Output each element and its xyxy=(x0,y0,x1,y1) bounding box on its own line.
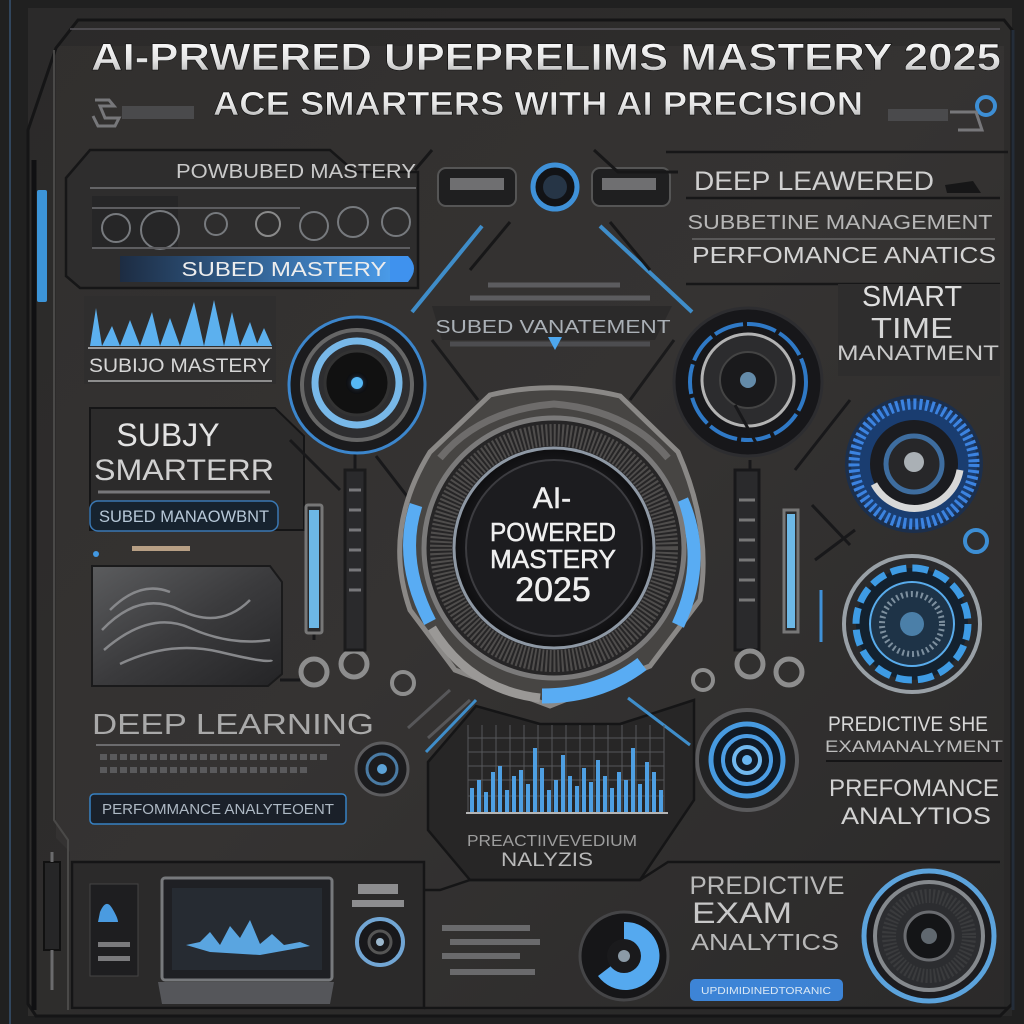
hub: blue ring segments xyxy=(410,500,694,696)
central hub xyxy=(400,388,703,706)
hub: label: MASTERY xyxy=(490,544,616,574)
chart bars xyxy=(470,748,663,812)
progress label: SUBED MASTERY xyxy=(182,259,386,281)
hub: label: AI- xyxy=(533,482,571,515)
block: predictive exam analytics: PREDICTIVE xyxy=(690,872,844,900)
center lower text stubs xyxy=(442,928,540,972)
left frame blue accent xyxy=(37,190,47,302)
panel: subject smarter: SMARTERR xyxy=(94,454,274,487)
icon: small lens lower left xyxy=(356,690,470,795)
block: smart time management: SMART xyxy=(862,281,962,313)
arrow: upper left diagonal xyxy=(412,226,482,312)
text block: deep learning left xyxy=(90,709,374,824)
text block: predictive analytics right: EXAMANALYMENT xyxy=(825,737,1003,756)
hub: metal arcs xyxy=(432,404,668,698)
right frame blue edge xyxy=(1012,30,1014,1010)
block: predictive exam analytics: ANALYTICS xyxy=(691,929,839,955)
dial: lower center right xyxy=(697,710,797,810)
text block: predictive analytics right: ANALYTIOS xyxy=(841,803,991,830)
waveform bars xyxy=(90,300,272,346)
title: AI-PRWERED UPEPRELIMS MASTERY 2025 xyxy=(91,37,1001,79)
slider: small xyxy=(93,546,190,557)
block: subject management center xyxy=(432,285,674,400)
button: subject management xyxy=(90,501,278,531)
button: subject management: SUBED MANAOWBNT xyxy=(99,507,269,526)
icon: pie dial xyxy=(580,912,668,1000)
hub: label: POWERED xyxy=(490,517,616,547)
text block: deep learning left: DEEP LEARNING xyxy=(92,709,374,741)
icon: laptop xyxy=(158,878,334,1004)
panel: subject smarter xyxy=(90,408,304,531)
block: smart time management: TIME xyxy=(871,313,953,345)
hub: label xyxy=(490,482,616,609)
block: top right list xyxy=(666,152,1008,284)
button: performance analytics: PERFOMMANCE ANALYTEOENT xyxy=(102,801,334,818)
block: top right list: SUBBETINE MANAGEMENT xyxy=(688,212,992,234)
text block: predictive analytics right: PREFOMANCE xyxy=(829,775,999,802)
chart caption xyxy=(467,833,637,871)
right connector assembly xyxy=(693,400,987,690)
block: smart time management: MANATMENT xyxy=(837,342,999,365)
text block: predictive analytics right: PREDICTIVE SHE xyxy=(828,713,988,736)
dial: right lower xyxy=(844,556,980,692)
title: ACE SMARTERS WITH AI PRECISION xyxy=(213,85,863,122)
small readout xyxy=(352,884,404,907)
chart caption: PREACTIIVEVEDIUM xyxy=(467,833,637,850)
button: analytics bar: UPDIMIDINEDTORANIC xyxy=(701,986,831,997)
block: predictive exam analytics: EXAM xyxy=(692,897,792,930)
image panel: terrain xyxy=(92,566,282,686)
panel: waveform mastery: SUBIJO MASTERY xyxy=(89,356,271,377)
chart caption: NALYZIS xyxy=(501,850,593,871)
button: analytics bar xyxy=(690,979,843,1001)
dial: upper right xyxy=(674,308,822,456)
arrow: upper right diagonal xyxy=(600,226,692,312)
chart grid xyxy=(468,725,664,812)
top center control xyxy=(438,165,670,209)
icon: small blue ring xyxy=(357,919,403,965)
block: top right list: DEEP LEAWERED xyxy=(694,166,934,196)
panel outline: top center chevrons xyxy=(415,150,678,270)
header ornament: right xyxy=(888,97,995,130)
thumbnail strip xyxy=(92,196,410,249)
block: subject management center: SUBED VANATEMENT xyxy=(436,317,671,337)
frame polygon: center lower xyxy=(424,862,1008,1008)
left connector assembly xyxy=(280,440,414,694)
icon: side gauge xyxy=(44,852,138,990)
dial: bottom right xyxy=(864,871,994,1001)
progress label xyxy=(120,256,414,282)
dial: right blue xyxy=(848,398,980,530)
dial: upper left xyxy=(289,317,425,453)
block: smart time management xyxy=(837,281,1000,376)
hub: outer ring xyxy=(400,388,703,706)
block: top right list: PERFOMANCE ANATICS xyxy=(692,242,996,268)
hub: label: 2025 xyxy=(515,571,591,609)
text block: predictive analytics right xyxy=(825,713,1003,830)
title xyxy=(91,37,1001,122)
panel: subject smarter: SUBJY xyxy=(116,417,220,453)
chart: predictive analysis xyxy=(426,698,694,880)
panel: bottom left monitor xyxy=(44,852,424,1008)
panel: waveform mastery xyxy=(84,296,276,384)
panel: top left mastery xyxy=(66,150,418,288)
heading: powered mastery: POWBUBED MASTERY xyxy=(176,161,416,183)
header ornament: left xyxy=(93,100,194,126)
button: performance analytics xyxy=(90,794,346,824)
block: predictive exam analytics xyxy=(690,872,844,1001)
